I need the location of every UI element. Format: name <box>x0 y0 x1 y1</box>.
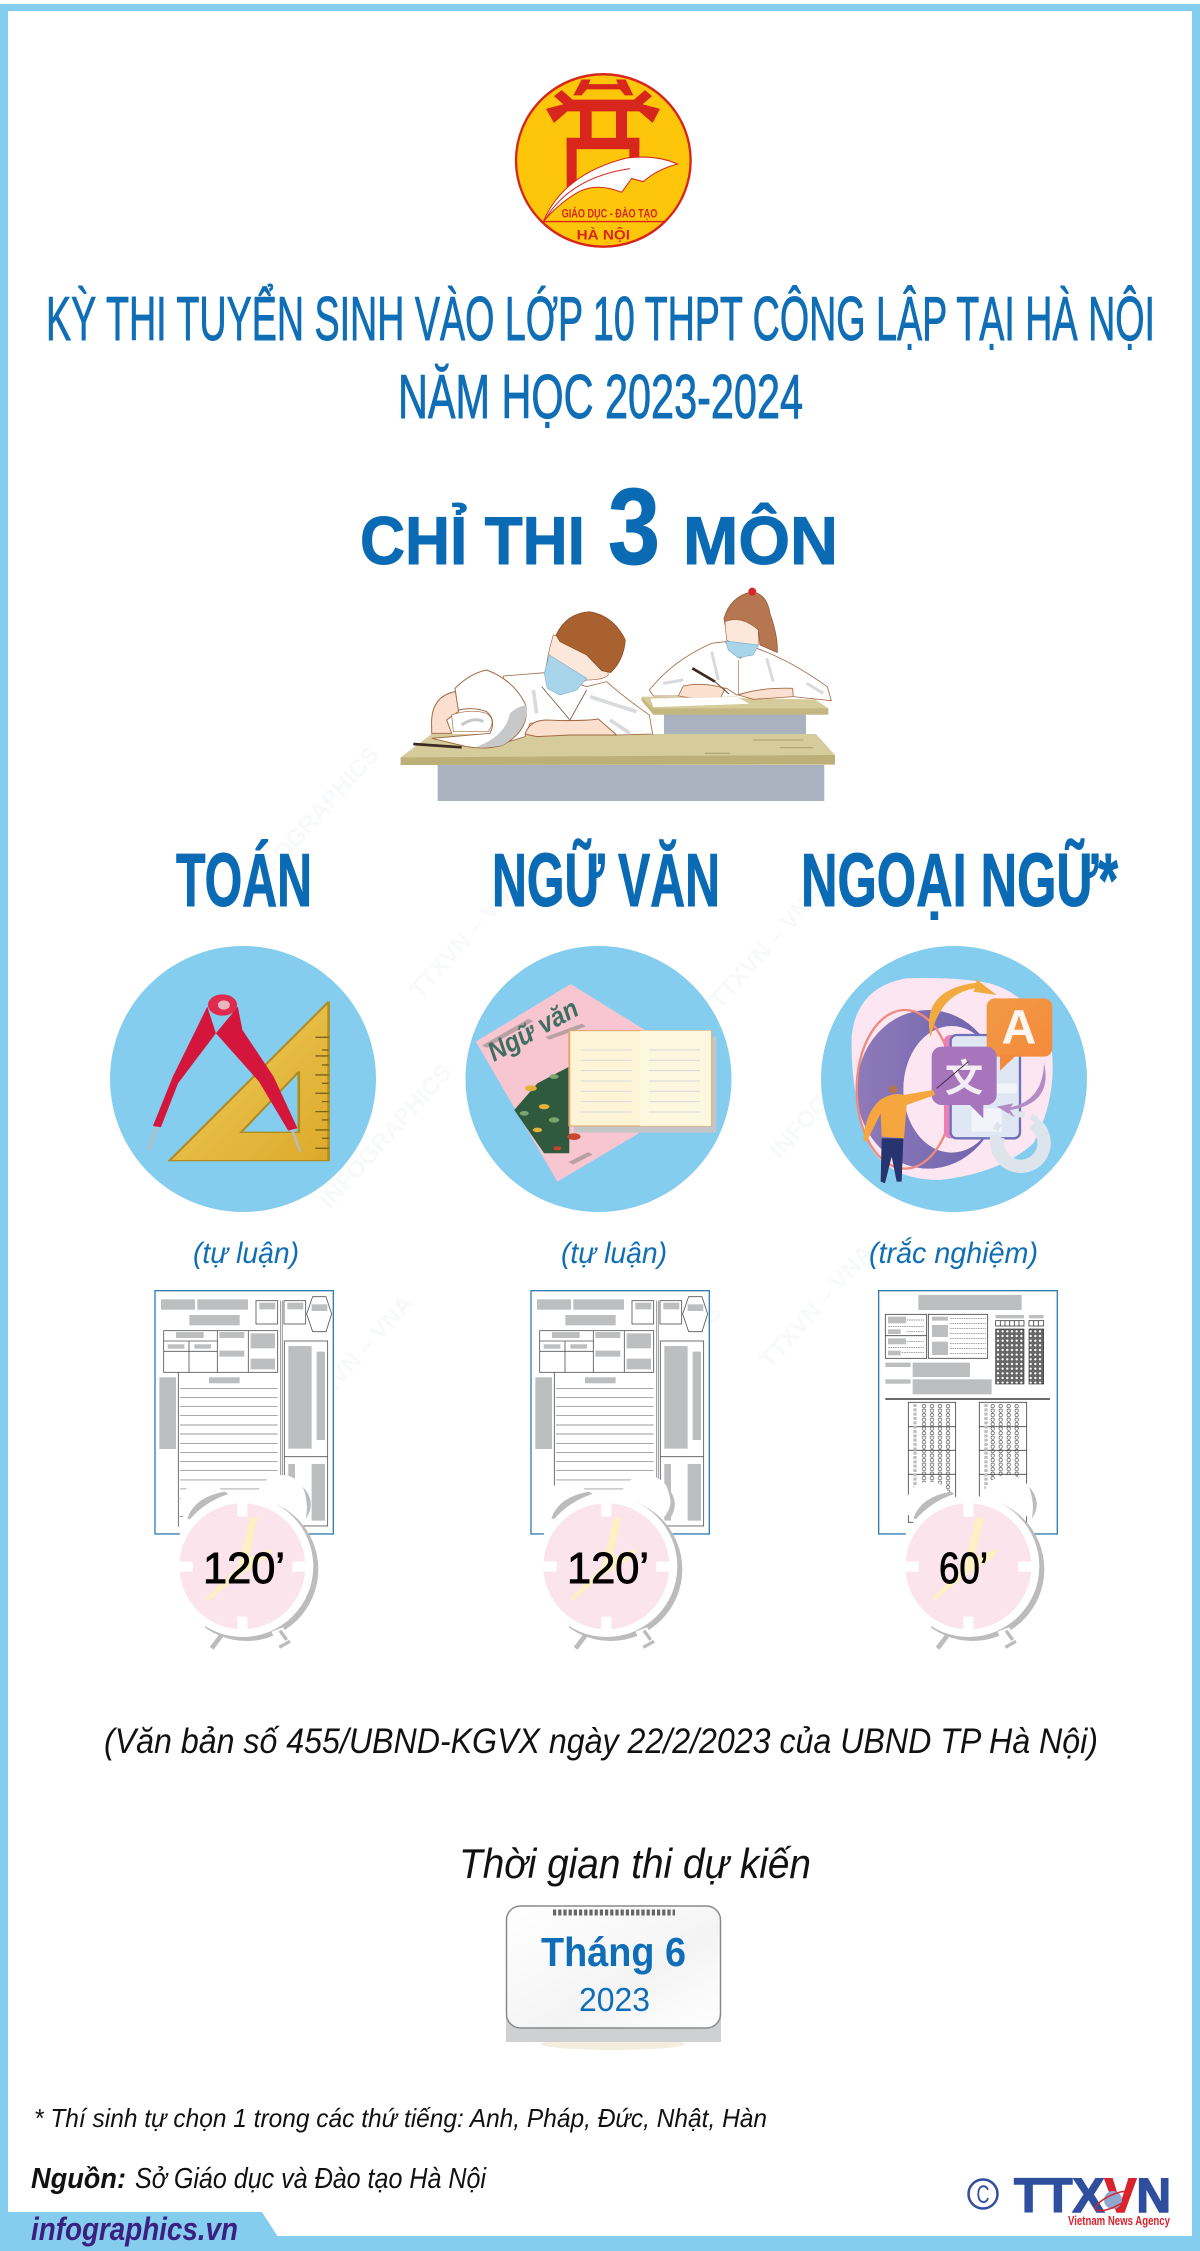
source: Nguồn: <box>31 2163 126 2195</box>
watermarks <box>242 741 908 1454</box>
watermarks: INFOGRAPHICS <box>314 1059 458 1214</box>
logo: TTXVN Vietnam News Agency: Vietnam News Agency <box>1068 2214 1170 2228</box>
calendar: Tháng 6 2023: 2023 <box>579 1981 650 2018</box>
girl student <box>649 588 831 707</box>
subtitle: chỉ thi 3 môn: CHỈ THI <box>360 502 585 579</box>
exam sheet and clock: Toán: 120’ <box>203 1544 285 1593</box>
icon: foreign language translation <box>821 946 1087 1212</box>
icon: foreign language translation: A <box>1002 1000 1036 1054</box>
logo: TTXVN Vietnam News Agency: C <box>976 2181 990 2209</box>
label: trắc nghiệm: (trắc nghiệm) <box>869 1237 1038 1270</box>
source <box>31 2163 487 2195</box>
logo: Sở Giáo dục Đào tạo Hà Nội: GIÁO DỤC - ĐÀO TẠO <box>562 207 657 220</box>
calendar: Tháng 6 2023: Tháng 6 <box>541 1929 686 1975</box>
label: tự luận (Ngữ văn): (tự luận) <box>561 1237 667 1270</box>
watermarks: INFOGRAPHICS <box>242 741 385 896</box>
icon: literature book: Ngữ văn <box>482 993 583 1067</box>
heading: Ngữ văn: NGỮ VĂN <box>492 838 720 922</box>
calendar: Tháng 6 2023 <box>506 1906 721 2050</box>
icon: math compass and set square <box>110 946 376 1212</box>
logo: TTXVN Vietnam News Agency: TTXVN <box>1014 2170 1171 2223</box>
heading: expected exam time: Thời gian thi dự kiến <box>459 1840 811 1887</box>
footer banner: infographics.vn: infographics.vn <box>31 2211 238 2247</box>
back desk <box>642 697 828 734</box>
watermarks: TTXVN – VNA <box>754 1240 879 1374</box>
icon: literature book <box>466 946 732 1212</box>
exam sheet and clock: Ngoại ngữ <box>879 1291 1057 1648</box>
exam sheet and clock: Toán <box>155 1291 333 1648</box>
icon: foreign language translation: 文 <box>945 1049 983 1104</box>
footnote: * Thí sinh tự chọn 1 trong các thứ tiếng: Anh, Pháp, Đức, Nhật, Hàn <box>34 2103 767 2133</box>
title: NĂM HỌC 2023-2024 <box>398 363 803 432</box>
watermarks: TTXVN – VNA <box>294 1290 419 1424</box>
illustration: students taking exam <box>401 588 835 801</box>
citation: (Văn bản số 455/UBND-KGVX ngày 22/2/2023 của UBND TP Hà Nội) <box>104 1722 1098 1761</box>
watermarks: INFOGRAPHICS <box>764 1009 908 1164</box>
exam sheet and clock: Ngoại ngữ: 60’ <box>939 1544 988 1593</box>
subtitle: chỉ thi 3 môn: 3 <box>608 466 660 588</box>
front desk <box>401 734 835 801</box>
watermarks: INFOGRAPHICS <box>584 1299 728 1454</box>
heading: Toán: TOÁN <box>176 838 312 922</box>
logo: Sở Giáo dục Đào tạo Hà Nội: HÀ NỘI <box>577 225 630 242</box>
source: Sở Giáo dục và Đào tạo Hà Nội <box>135 2163 487 2195</box>
subtitle: chỉ thi 3 môn <box>360 466 838 588</box>
title <box>46 285 1155 432</box>
exam sheet and clock: Ngữ văn: 120’ <box>567 1544 649 1593</box>
label: tự luận (Toán): (tự luận) <box>193 1237 299 1270</box>
exam sheet and clock: Ngữ văn <box>531 1291 709 1648</box>
watermarks: TTXVN – VNA <box>404 870 529 1004</box>
watermarks: TTXVN – VNA <box>704 880 829 1014</box>
boy student <box>413 612 653 748</box>
logo: Sở Giáo dục Đào tạo Hà Nội <box>516 74 691 247</box>
subtitle: chỉ thi 3 môn: MÔN <box>683 502 838 579</box>
